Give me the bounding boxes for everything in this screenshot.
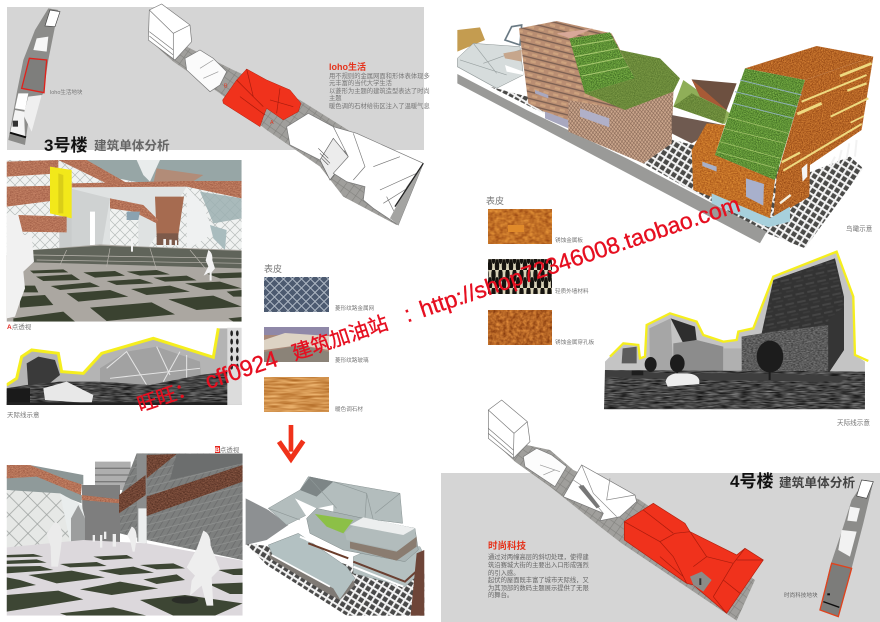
- text block: fashion technology: 通过对两幢高层的斜切处理，使得建: [488, 552, 589, 561]
- text block: loho life: 主题: [329, 93, 342, 102]
- text block: fashion technology: 起伏的屋面既丰富了城市天际线，又: [488, 575, 589, 584]
- perspective view A: [7, 160, 242, 322]
- swatch: diamond glass: [264, 327, 329, 362]
- perspective view B: [7, 453, 243, 616]
- connecting roofs: [672, 79, 737, 143]
- chart: building 3 street massing model: [148, 4, 423, 225]
- watermark: :: [401, 301, 415, 327]
- olive roof: [585, 50, 680, 110]
- panel: building 3 site map: [8, 8, 60, 145]
- text block: fashion technology: 的舞台。: [488, 590, 513, 599]
- pink stone tower: [519, 21, 673, 163]
- neighbouring tan block: [457, 27, 485, 52]
- label: diamond glass: 菱形纹路玻璃: [335, 356, 369, 364]
- text block: loho life: 元丰富的当代大学生活: [329, 78, 393, 87]
- materials: building 3 skin: [264, 263, 375, 413]
- swatch: perforated rusted metal: [488, 310, 552, 345]
- text block: fashion technology: 为其顶部的数码主题展示提供了无限: [488, 583, 589, 592]
- text block: fashion technology: 的引入感。: [488, 568, 519, 577]
- materials: building 4 skin: [486, 195, 595, 346]
- label: fashion technology site: 时尚科技地块: [784, 591, 818, 599]
- caption: B point perspective: B点透视: [215, 445, 240, 454]
- label: diamond metal mesh: 菱形纹路金属网: [335, 304, 375, 312]
- watermark: 旺旺：: [135, 377, 198, 417]
- yellow facade strips: [780, 63, 872, 203]
- caption: skyline right: 天际线示意: [837, 418, 870, 427]
- panel: building 3 header background: [7, 7, 424, 150]
- swatch: diamond metal mesh: [264, 277, 329, 312]
- rust tower side: [773, 57, 873, 218]
- label: rusted metal panel: 锈蚀金属板: [555, 236, 583, 244]
- caption: A point perspective: A点透视: [7, 322, 32, 331]
- caption: bird's-eye view: 鸟瞰示意: [846, 224, 873, 233]
- label: loho site: loho生活地块: [50, 88, 83, 96]
- watermark: 建筑加油站: [289, 311, 391, 365]
- road edge: [457, 74, 767, 243]
- label: lightweight cladding: 轻质外墙材料: [555, 287, 589, 295]
- text block: loho life: 用不规则的金属网面和形体表体现多: [329, 71, 430, 80]
- heading: skin: 表皮: [264, 263, 282, 274]
- heading: skin: 表皮: [486, 195, 504, 206]
- text block: loho life: [329, 61, 430, 110]
- watermark: cff0924: [202, 345, 281, 394]
- text block: loho life: 暖色调的石材给街区注入了温暖气息: [329, 101, 430, 110]
- chart: building 3 massing model: [246, 477, 424, 616]
- panel: building 4 header background: [441, 473, 880, 622]
- chart: building 3 skyline: [7, 328, 242, 405]
- caption: skyline: 天际线示意: [7, 410, 40, 419]
- heading: building 4: 建筑单体分析: [779, 475, 855, 490]
- chart: building 3 street massing model: B: [224, 83, 228, 89]
- heading: building 3: [44, 136, 170, 155]
- text block: fashion technology: [488, 540, 589, 599]
- swatch: warm stone: [264, 377, 329, 412]
- ground hatch: [490, 87, 863, 248]
- swatch: rusted metal panel: [488, 209, 552, 244]
- label: warm stone: 暖色调石材: [335, 405, 363, 413]
- arrow: red down: [279, 425, 303, 459]
- rust tower roof: [745, 46, 873, 80]
- text block: loho life: 以菱形为主题的建筑造型表达了时尚: [329, 86, 430, 95]
- chart: building 4 street massing model: [488, 400, 763, 621]
- label: perforated rusted metal: 锈蚀金属穿孔板: [555, 338, 595, 346]
- watermark: http://shop72346008.taobao.com: [416, 191, 743, 322]
- chart: building 3 street massing model: A: [270, 120, 274, 126]
- rust tower green wall: [715, 68, 805, 180]
- windows: [702, 140, 857, 227]
- neighbouring glass block: [457, 25, 523, 88]
- panel: building 4 site map: [820, 480, 873, 617]
- heading: building 4: [730, 472, 855, 491]
- green wall: [569, 32, 635, 93]
- text block: loho life: loho生活: [329, 61, 366, 72]
- swatch: lightweight cladding: [488, 259, 552, 294]
- heading: building 4: 4号楼: [730, 472, 773, 491]
- text block: fashion technology: 时尚科技: [488, 540, 527, 552]
- heading: building 3: 建筑单体分析: [94, 138, 170, 153]
- text block: fashion technology: 筑沿赛城大街的主要出入口形成强烈: [488, 560, 589, 569]
- chart: building 4 aerial view: [457, 21, 873, 248]
- rust tower podium: [692, 123, 775, 218]
- heading: building 3: 3号楼: [44, 136, 87, 155]
- chart: building 4 skyline: [604, 252, 868, 409]
